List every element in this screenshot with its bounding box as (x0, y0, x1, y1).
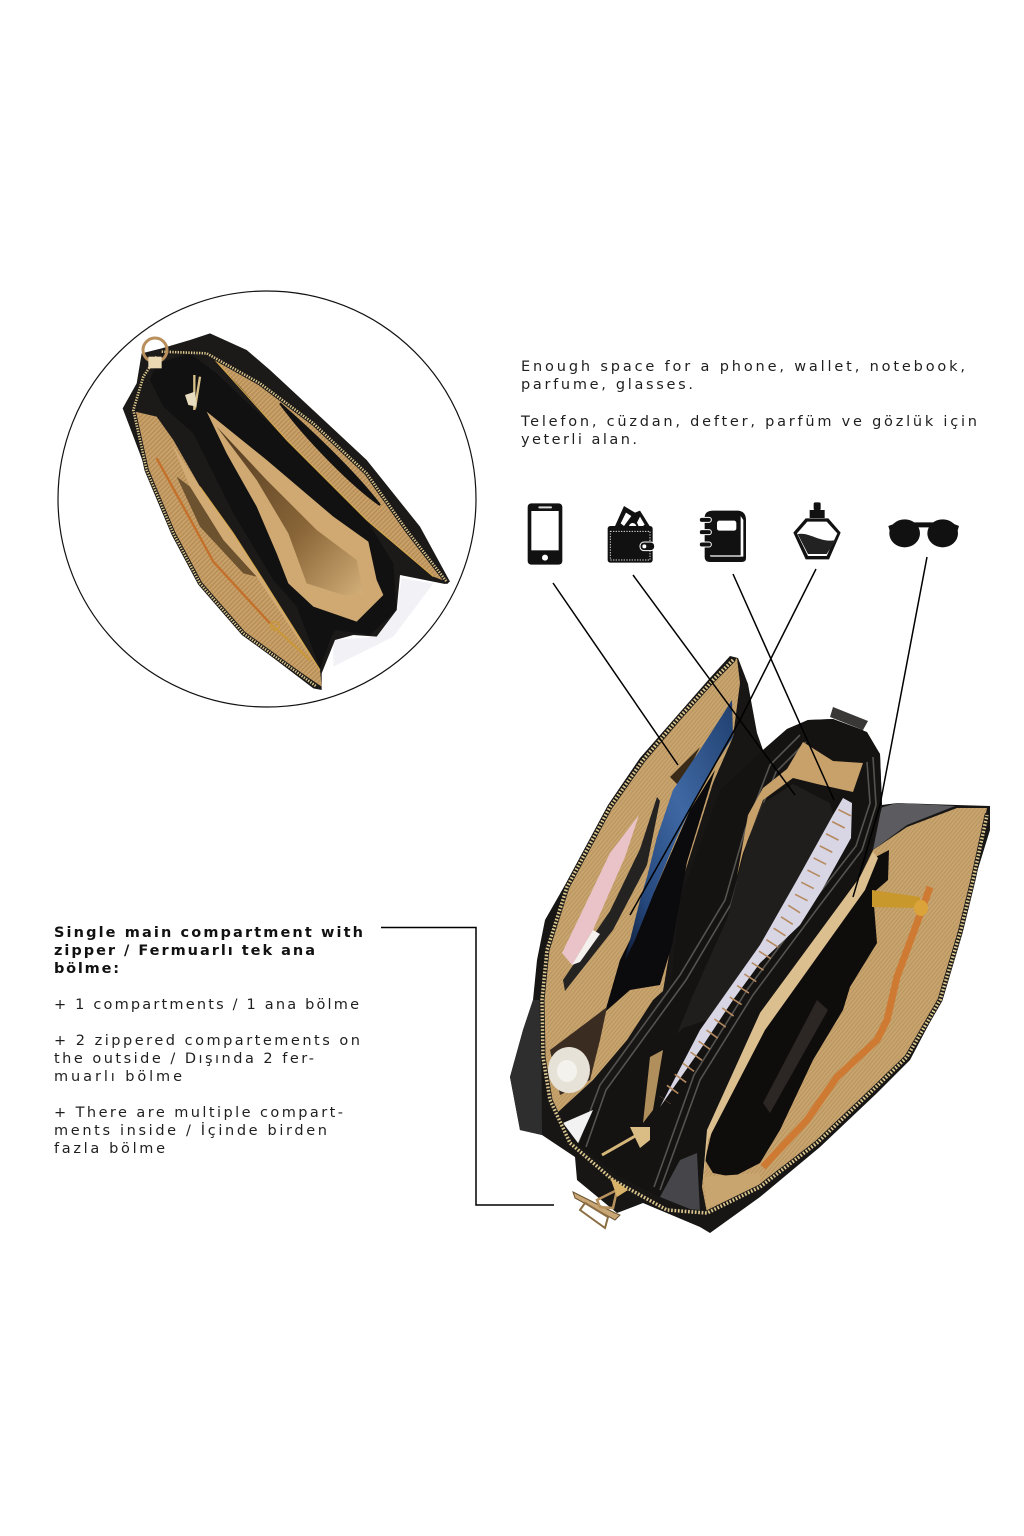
centre stitching (578, 735, 876, 1190)
lower centre lining (643, 1050, 663, 1123)
right flap lining (702, 808, 987, 1213)
bag outer silhouette (510, 656, 990, 1233)
detail circle with small bag (58, 291, 476, 707)
heading (54, 925, 363, 977)
slip pocket with banknotes (562, 797, 660, 991)
shadow by phone (670, 747, 700, 787)
inner orange zipper (763, 887, 930, 1167)
leader lines from icons to bag (553, 557, 927, 915)
list items: muarlı bölme (54, 1069, 182, 1085)
zipper pull (centre) (602, 1127, 650, 1155)
interior sheen (763, 1000, 828, 1113)
phone in pocket (625, 700, 733, 960)
list items: + 2 zippered compartements on (54, 1033, 360, 1049)
strap tab (830, 707, 868, 730)
icon: phone (528, 503, 562, 565)
heading: bölme: (54, 961, 119, 977)
main photo: open bag with items (510, 656, 990, 1233)
shiny leather bottom panel (660, 1153, 700, 1213)
text block: capacity description: Telefon, cüzdan, defter, parfüm ve gözlük için (520, 414, 977, 430)
left flap lining (542, 658, 740, 1113)
heading: Single main compartment with (54, 925, 363, 941)
bracket line from text to bag zipper (381, 928, 554, 1205)
centre compartment lining (737, 742, 863, 876)
hardware clasp (573, 1177, 628, 1228)
black leather pouch (677, 784, 833, 1034)
list items: + 1 compartments / 1 ana bölme (54, 997, 359, 1013)
perfume bottle (548, 1007, 607, 1095)
text block: capacity description: Enough space for a phone, wallet, notebook, (521, 359, 965, 375)
lining corner at bottom (703, 1173, 760, 1208)
main zipper tape (542, 660, 987, 1213)
list items: fazla bölme (54, 1141, 165, 1157)
icon: perfume bottle (793, 502, 841, 559)
icon: sunglasses (888, 519, 959, 547)
left leather side panel (510, 1000, 542, 1135)
text block: capacity description (520, 359, 977, 448)
photo: bag top view (small) (123, 333, 450, 690)
list items (54, 997, 360, 1157)
icon: notebook (699, 511, 746, 562)
dark gap below phone (605, 770, 715, 1012)
list items: the outside / Dışında 2 fer- (54, 1051, 314, 1067)
text block: capacity description: yeterli alan. (521, 432, 637, 448)
heading: zipper / Fermuarlı tek ana (54, 943, 315, 959)
right compartment dark interior (705, 850, 889, 1177)
icon row (528, 502, 959, 565)
gold zipper pull (872, 890, 928, 916)
centre compartment frame (577, 719, 882, 1197)
white gap beside flap base (563, 1110, 593, 1143)
pale lining strip (702, 852, 878, 1190)
circle outline (58, 291, 476, 707)
text block: capacity description: parfume, glasses. (521, 377, 693, 393)
notebook (660, 798, 852, 1107)
icon: wallet (608, 506, 655, 563)
text block: compartment list (54, 925, 363, 1157)
list items: + There are multiple compart- (54, 1105, 343, 1121)
right flap leather top (873, 803, 955, 850)
list items: ments inside / İçinde birden (54, 1121, 327, 1139)
